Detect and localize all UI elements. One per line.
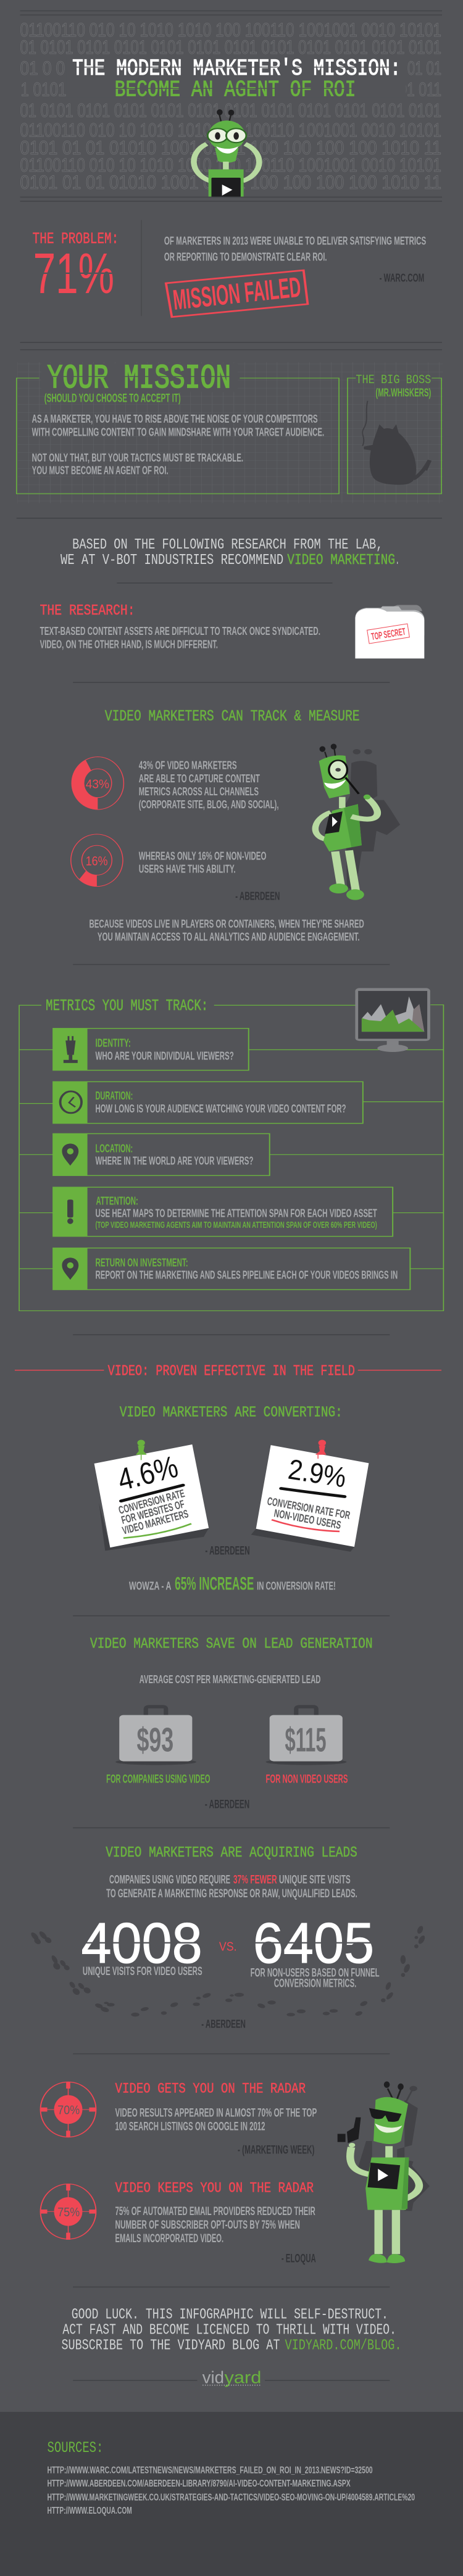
panel: your mission: YOU MUST BECOME AN AGENT OF ROI.: [32, 464, 169, 477]
metric: location: LOCATION:: [95, 1141, 133, 1155]
lead cost and leads section: - ABERDEEN: [205, 1797, 249, 1810]
text: opt-outs: [115, 2205, 315, 2245]
text: 43% of video marketers: ARE ABLE TO CAPTURE CONTENT: [139, 772, 260, 785]
text: 37% fewer: [106, 1873, 357, 1900]
text: 16% of non-video users: USERS HAVE THIS ABILITY.: [139, 862, 236, 875]
robot shadow: [357, 2086, 430, 2211]
problem statistic: 71%: [33, 242, 114, 305]
icon: cat silhouette with cigarette smoke: [362, 401, 430, 485]
panel: sources: HTTP://WWW.ELOQUA.COM: [48, 2506, 132, 2516]
metric: identity: WHO ARE YOUR INDIVIDUAL VIEWERS?: [95, 1050, 234, 1062]
note text: 4.6%: 4.6%: [114, 1449, 181, 1497]
research block: VIDEO, ON THE OTHER HAND, IS MUCH DIFFERENT.: [40, 638, 218, 651]
metric: location: [53, 1133, 270, 1176]
versus label: VS.: [219, 1940, 237, 1954]
icon: clock: [60, 1091, 81, 1113]
problem statistic: THE PROBLEM:: [33, 230, 119, 248]
icon: map pin: [62, 1143, 78, 1166]
note shape: video marketers conversion: [94, 1439, 209, 1551]
donut chart: 43%: 43%: [86, 778, 109, 791]
title: [67, 56, 406, 103]
radar target: 75%: 75%: [57, 2206, 80, 2219]
problem statistic: [33, 230, 119, 305]
metric: identity: IDENTITY:: [95, 1036, 131, 1050]
recommendation text: WE AT V-BOT INDUSTRIES RECOMMEND: [60, 551, 283, 568]
icon: top secret folder: [355, 605, 424, 658]
panel: your mission: YOUR MISSION: [48, 360, 231, 398]
text: search listings: [115, 2106, 317, 2133]
recommendation text: VIDEO MARKETING: [287, 551, 395, 568]
radar target: 70%: [40, 2082, 96, 2137]
radar section: - (MARKETING WEEK): [238, 2143, 314, 2156]
icon: briefcase $93: [115, 1707, 196, 1765]
track and measure section: (CORPORATE SITE, BLOG, AND SOCIAL),: [139, 798, 279, 811]
text: 43% of video marketers: [139, 759, 279, 811]
lead cost and leads section: UNIQUE SITE VISITS: [279, 1873, 351, 1886]
lead cost and leads section: FOR NON VIDEO USERS: [265, 1772, 348, 1786]
recommendation text: [60, 536, 399, 568]
logo: vidyard: [202, 2368, 261, 2387]
binary code background: 1 0101 010 0: [20, 79, 108, 101]
logo: vidyard: yard: [225, 2368, 261, 2387]
radar target: 75%: [40, 2184, 96, 2240]
panel: sources: SOURCES:: [48, 2440, 103, 2457]
stamp frame: mission failed: [166, 270, 307, 317]
note label: non-video users: CONVERSION RATE FOR: [266, 1495, 351, 1522]
big number: 4008: 4008: [81, 1911, 202, 1976]
big number: 6405: CONVERSION METRICS.: [274, 1976, 356, 1990]
text: 37% fewer: 37% FEWER: [233, 1873, 277, 1886]
footprints trail: [30, 1926, 426, 2016]
robot shadow: [346, 749, 400, 888]
icon: exclamation mark: [67, 1199, 73, 1224]
panel: your mission: [17, 360, 339, 494]
text: analytics access: [89, 917, 364, 943]
stamp text: mission failed: MISSION FAILED: [172, 270, 302, 316]
callout: 65% increase: WOWZA - A: [129, 1580, 171, 1592]
icon: map pin: [62, 1257, 78, 1280]
icon: monitor chart: [355, 988, 430, 1052]
radar section: - ELOQUA: [282, 2252, 316, 2265]
callout: 65% increase: 65% INCREASE: [175, 1573, 254, 1594]
track and measure section: - ABERDEEN: [235, 890, 280, 903]
video proven effective section: [15, 1335, 441, 1652]
closing message: remaining lines: SUBSCRIBE TO THE VIDYARD BLOG AT: [61, 2337, 280, 2354]
header section: [20, 11, 442, 317]
donut chart: 16%: 16%: [86, 853, 108, 868]
robot with magnifying glass: [315, 743, 400, 900]
binary code background: 01 0 0: [20, 57, 65, 79]
robot agent with sunglasses and gun: [338, 2081, 430, 2263]
heading: keeps you on the radar: VIDEO KEEPS YOU ON THE RADAR: [115, 2181, 314, 2197]
heading: metrics you must track: METRICS YOU MUST TRACK:: [46, 997, 208, 1016]
panel: your mission: (SHOULD YOU CHOOSE TO ACCEPT IT): [44, 391, 181, 405]
donut chart: 16%: [71, 834, 123, 887]
panel: metrics you must track: [19, 988, 443, 1311]
text: 43% of video marketers: METRICS ACROSS ALL CHANNELS: [139, 785, 259, 798]
metric: attention: [53, 1187, 393, 1236]
note label: video marketers: VIDEO MARKETERS: [121, 1507, 190, 1537]
radar target: 70%: 70%: [57, 2104, 80, 2118]
closing message: remaining lines: [61, 2322, 401, 2354]
binary code background: [20, 19, 441, 193]
stamp: top secret: [367, 624, 409, 644]
big number: 6405: [251, 1911, 380, 1990]
metric: identity: [53, 1028, 249, 1071]
icon: briefcase $93: $93: [136, 1721, 173, 1758]
text: opt-outs: EMAILS INCORPORATED VIDEO.: [115, 2232, 223, 2245]
callout: 65% increase: [129, 1573, 336, 1594]
research block: [40, 602, 320, 651]
radar section: - ABERDEEN: [201, 2018, 246, 2031]
note label: non-video users: [266, 1495, 351, 1531]
note label: video marketers: CONVERSION RATE: [117, 1487, 186, 1517]
icon: robot identity: [64, 1036, 78, 1063]
note label: non-video users: NON-VIDEO USERS: [273, 1507, 342, 1531]
big number: 6405: 6405: [253, 1911, 374, 1976]
panel: sources: [0, 2412, 463, 2576]
video proven effective section: IN CONVERSION RATE!: [257, 1580, 336, 1592]
lead cost and leads section: FOR COMPANIES USING VIDEO: [106, 1772, 211, 1786]
track and measure section: WHEREAS ONLY 16% OF NON-VIDEO: [139, 849, 266, 862]
metric: return on investment: RETURN ON INVESTMENT:: [95, 1256, 188, 1269]
radar section: [40, 2018, 430, 2324]
note shape: non-video conversion: [251, 1439, 369, 1552]
metric: location: WHERE IN THE WORLD ARE YOUR VIEWERS?: [95, 1154, 253, 1167]
mission section: [17, 342, 443, 658]
icon: briefcase $115: [265, 1707, 347, 1765]
note text: 2.9%: 2.9%: [286, 1453, 348, 1494]
metric: duration: [53, 1082, 363, 1124]
metric: attention: ATTENTION:: [96, 1194, 138, 1207]
footer section: [0, 2322, 463, 2576]
robot with binoculars eyes: [194, 109, 259, 197]
panel: the big boss: [348, 373, 441, 494]
metric: duration: DURATION:: [95, 1089, 133, 1102]
stamp: top secret: TOP SECRET: [370, 627, 406, 642]
note label: video marketers: FOR WEBSITES OF: [120, 1497, 186, 1526]
text: 37% fewer: COMPANIES USING VIDEO REQUIRE: [109, 1873, 230, 1886]
lead cost and leads section: UNIQUE VISITS FOR VIDEO USERS: [83, 1964, 202, 1978]
text: 43% of video marketers: 43% OF VIDEO MARKETERS: [139, 759, 237, 772]
text: 16% of non-video users: [139, 849, 266, 875]
heading: gets you on the radar: VIDEO GETS YOU ON THE RADAR: [115, 2082, 306, 2097]
icon: briefcase $115: $115: [285, 1721, 327, 1758]
lead cost and leads section: [30, 1673, 426, 2016]
metric: return on investment: [53, 1248, 410, 1290]
mission section: .: [396, 551, 399, 568]
logo: vidyard: vid: [202, 2368, 224, 2387]
note label: video marketers: [117, 1487, 190, 1537]
big number: 4008: [81, 1911, 202, 1978]
track and measure section: [71, 682, 400, 964]
problem description: [164, 234, 426, 284]
donut chart: 43%: [72, 757, 123, 810]
research block: THE RESEARCH:: [40, 602, 135, 619]
video proven effective section: - ABERDEEN: [205, 1544, 250, 1557]
